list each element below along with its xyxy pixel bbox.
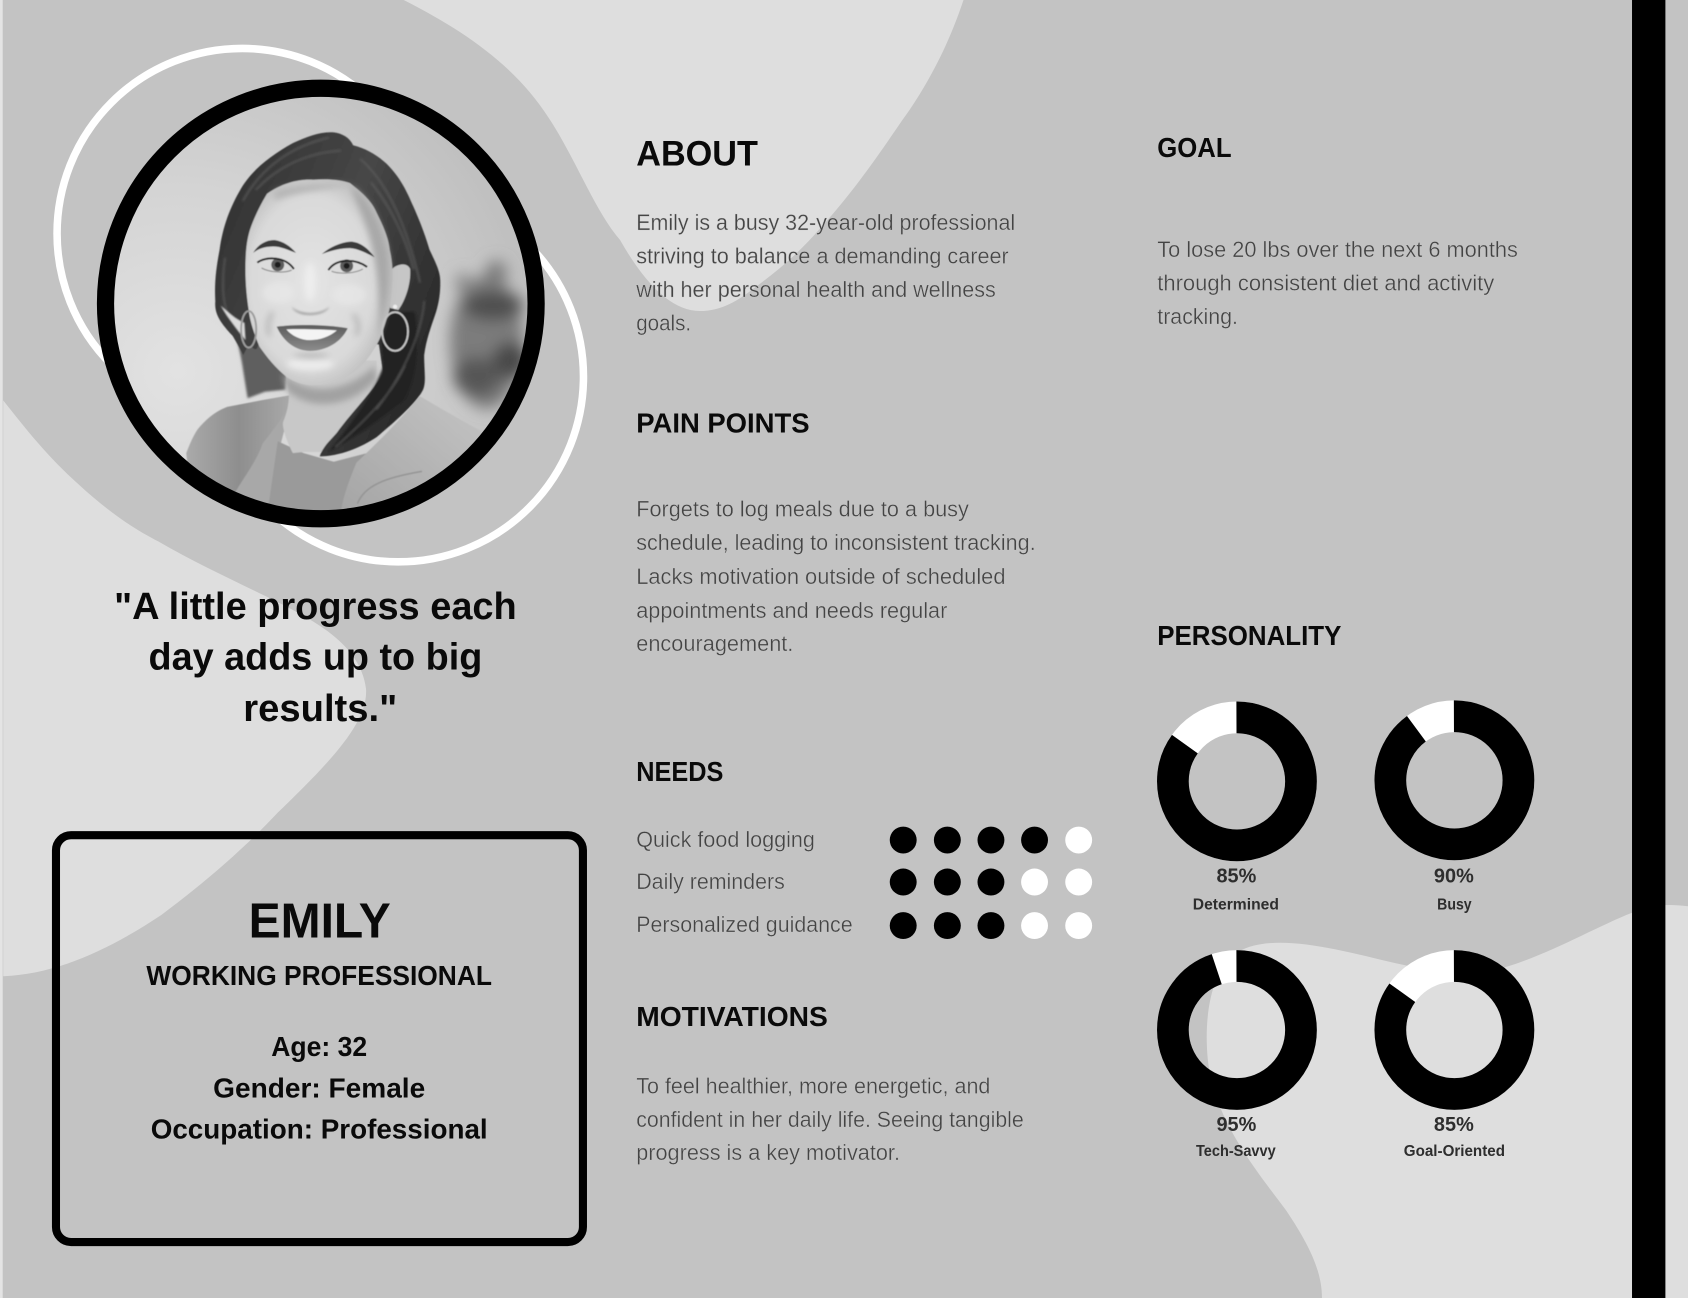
about heading: ABOUT [636, 134, 758, 174]
dark hair behind earring [328, 312, 417, 452]
donut: determined 85%: Determined [1193, 896, 1279, 913]
need: personalized guidance [636, 912, 1092, 939]
demographics: Age: 32 [271, 1031, 367, 1062]
pain points text: Lacks motivation outside of scheduled [636, 564, 1005, 589]
mouth [277, 325, 348, 351]
nose [292, 307, 329, 315]
demographics: Gender: Female [213, 1072, 425, 1103]
left eye [257, 258, 294, 272]
hair highlights [223, 138, 424, 447]
ear [390, 264, 410, 310]
portrait figure [186, 132, 482, 517]
need: quick food logging: Quick food logging [636, 827, 815, 852]
role: WORKING PROFESSIONAL [146, 960, 492, 991]
demographics [151, 1031, 488, 1145]
pain points text: schedule, leading to inconsistent tracking. [636, 530, 1036, 555]
needs heading: NEEDS [636, 756, 723, 787]
name: EMILY [249, 893, 391, 948]
left light blob [3, 400, 366, 976]
brows [253, 240, 296, 253]
about text: goals. [636, 310, 691, 335]
need: quick food logging [636, 827, 1092, 853]
chest and shirt [269, 442, 366, 510]
motivations text: To feel healthier, more energetic, and [636, 1074, 990, 1099]
needs rating list [636, 827, 1092, 939]
donut: goal-oriented 85% [1390, 966, 1518, 1160]
about text: striving to balance a demanding career [636, 244, 1009, 269]
goal text: To lose 20 lbs over the next 6 months [1157, 237, 1518, 262]
left lapel [236, 433, 273, 503]
about text [635, 210, 1015, 335]
goal heading: GOAL [1157, 132, 1232, 163]
profile card [56, 835, 583, 1242]
top light blob [404, 0, 963, 311]
donut: busy 90%: 90% [1434, 865, 1474, 888]
neck [282, 361, 377, 453]
need: daily reminders [636, 869, 1092, 895]
donut: tech-savvy 95%: 95% [1216, 1113, 1256, 1136]
quote: day adds up to big [149, 635, 482, 677]
left jacket [186, 395, 290, 492]
face [245, 179, 393, 385]
goal text [1157, 237, 1518, 329]
motivations text: confident in her daily life. Seeing tangible [636, 1107, 1024, 1132]
about text: with her personal health and wellness [635, 277, 996, 302]
donut: determined 85% [1173, 717, 1301, 913]
decorative white ring upper left [57, 48, 427, 419]
portrait photo [108, 91, 538, 522]
pain points text: Forgets to log meals due to a busy [636, 497, 970, 522]
motivations text: progress is a key motivator. [636, 1140, 900, 1165]
right black bar [1632, 0, 1665, 1298]
donut: busy 90%: Busy [1437, 896, 1472, 913]
donut: goal-oriented 85%: Goal-Oriented [1404, 1143, 1505, 1160]
need: daily reminders: Daily reminders [636, 869, 785, 894]
pain points text [636, 497, 1036, 656]
donut: goal-oriented 85%: 85% [1434, 1113, 1474, 1136]
pain points text: appointments and needs regular [636, 598, 948, 623]
personality heading: PERSONALITY [1157, 620, 1342, 651]
donut: determined 85%: 85% [1216, 865, 1256, 888]
quote [114, 585, 517, 729]
goal text: through consistent diet and activity [1157, 271, 1495, 296]
demographics: Occupation: Professional [151, 1114, 488, 1145]
blurred plant [450, 260, 529, 409]
goal text: tracking. [1157, 304, 1238, 329]
about text: Emily is a busy 32-year-old professional [636, 210, 1015, 235]
black portrait ring [106, 88, 536, 519]
quote: "A little progress each [114, 585, 517, 627]
need: personalized guidance: Personalized guidance [636, 912, 853, 937]
left hair wisp highlight [221, 306, 245, 340]
teeth [286, 329, 337, 340]
motivations text [636, 1074, 1024, 1165]
face shading [262, 184, 390, 370]
left hair lower back [236, 343, 287, 400]
bottom right light blob [1207, 905, 1688, 1298]
earrings [241, 305, 408, 351]
right eye [328, 259, 367, 273]
motivations heading: MOTIVATIONS [636, 1001, 828, 1032]
right jacket [342, 396, 476, 509]
quote: results." [243, 687, 397, 729]
pain points text: encouragement. [636, 631, 793, 656]
donut: tech-savvy 95% [1173, 966, 1301, 1160]
decorative white ring lower right [213, 192, 583, 562]
pain points heading: PAIN POINTS [636, 408, 810, 439]
donut: tech-savvy 95%: Tech-Savvy [1196, 1143, 1276, 1160]
donut: busy 90% [1390, 716, 1518, 913]
hair mass [215, 132, 440, 456]
